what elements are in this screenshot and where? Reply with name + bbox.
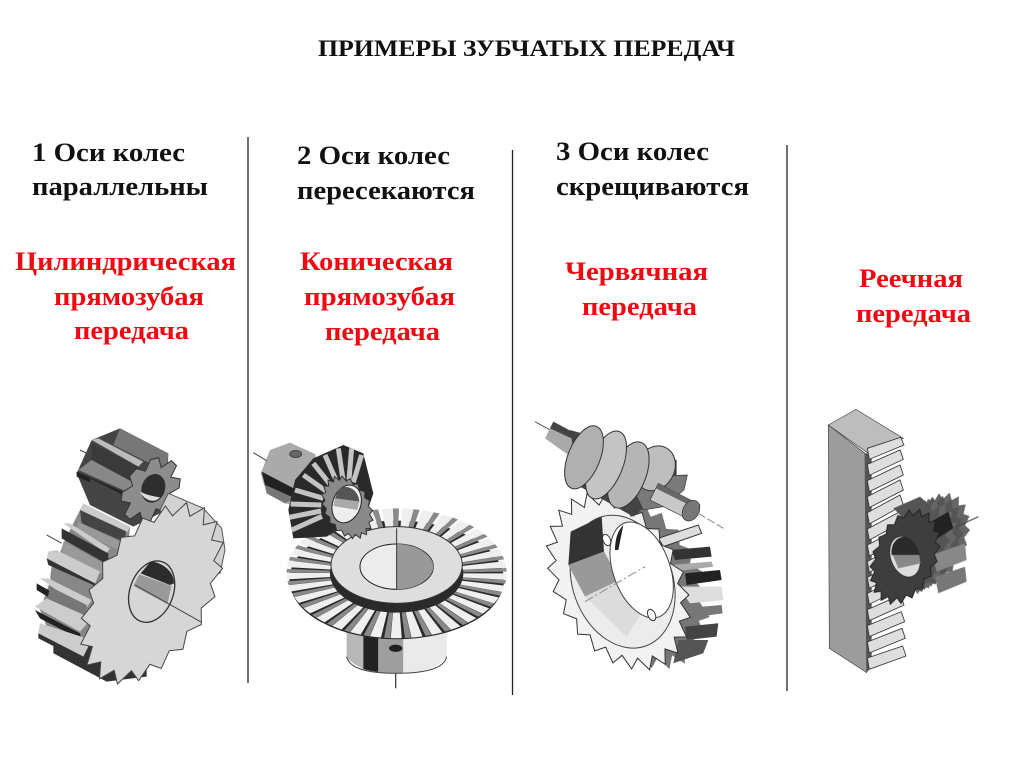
column 1 gear type label: прямозубая (54, 282, 204, 311)
column 1 heading: параллельны (32, 172, 208, 201)
column 2 gear type label: передача (325, 317, 440, 346)
column 3 gear type label (565, 257, 708, 321)
column 4 gear type label (856, 264, 971, 328)
column 4 gear type label: Реечная (859, 264, 963, 293)
column 3 heading: скрещиваются (556, 172, 749, 201)
column 3 heading: 3 Оси колес (556, 137, 709, 166)
pinion (866, 483, 978, 613)
column 1 gear type label: Цилиндрическая (15, 247, 236, 276)
column 1 gear type label (15, 247, 236, 345)
illustration: spur gear pair (35, 428, 236, 706)
rack (828, 409, 906, 673)
large bevel gear teeth (289, 521, 504, 639)
column 2 heading (297, 141, 475, 205)
large bevel gear face (331, 527, 462, 603)
title: ПРИМЕРЫ ЗУБЧАТЫХ ПЕРЕДАЧ (318, 36, 735, 61)
large gear rim behind the face (160, 493, 225, 577)
axis lines (47, 450, 202, 622)
column 1 heading: 1 Оси колес (32, 138, 185, 167)
column 2 gear type label: Коническая (300, 247, 453, 276)
column 2 gear type label: прямозубая (304, 282, 455, 311)
worm shaft and threads (535, 420, 723, 528)
large gear teeth (35, 503, 147, 682)
column 2 gear type label (300, 247, 455, 346)
illustration: rack and pinion (828, 409, 978, 673)
small pinion (77, 428, 184, 528)
hub of large bevel gear (347, 630, 447, 688)
large gear bore (120, 554, 183, 629)
large gear face (68, 481, 236, 706)
column 1 gear type label: передача (74, 316, 189, 345)
worm wheel face (534, 481, 702, 682)
column 3 gear type label: передача (582, 292, 697, 321)
column 3 heading (556, 137, 749, 201)
column 4 gear type label: передача (856, 299, 971, 328)
column 3 gear type label: Червячная (565, 257, 708, 286)
column 1 heading (32, 138, 208, 201)
illustration: bevel gear pair (253, 443, 504, 688)
worm wheel rim and bore (552, 500, 693, 663)
small bevel gear cone (288, 445, 378, 542)
illustration: worm gear pair (534, 420, 723, 682)
column 2 heading: пересекаются (297, 176, 475, 205)
worm wheel back teeth (555, 482, 723, 682)
column dividers (248, 137, 787, 695)
column 2 heading: 2 Оси колес (297, 141, 450, 170)
shaft of small bevel gear (253, 443, 320, 507)
